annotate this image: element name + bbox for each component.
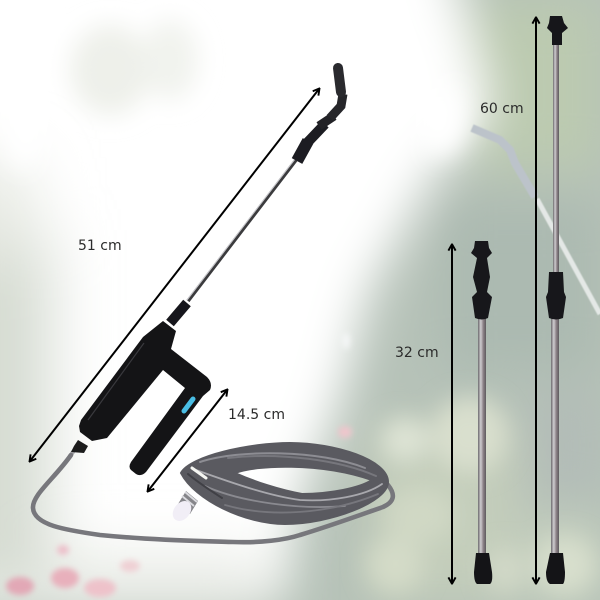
label: 14.5 cm: 14.5 cm — [228, 407, 285, 423]
extension rod: 32 cm — [471, 241, 492, 584]
spray wand with nozzle — [170, 68, 343, 323]
feed hose — [33, 440, 393, 542]
label: 32 cm: 32 cm — [395, 345, 439, 361]
indicator light — [184, 399, 193, 411]
extension rod: 60 cm — [546, 16, 568, 584]
hose coil — [33, 440, 393, 542]
ghost sprayer in background — [472, 128, 600, 314]
dimension arrow: 14.5 cm — [148, 390, 227, 491]
dimension arrow: 60 cm — [535, 18, 537, 583]
handle with trigger grip — [79, 321, 211, 475]
dimension arrow: 32 cm — [451, 245, 453, 583]
coil body — [181, 443, 388, 524]
dimension arrow: 51 cm — [30, 89, 319, 461]
label: 51 cm: 51 cm — [78, 238, 122, 254]
hose filter — [169, 491, 198, 525]
small gap inside coil — [192, 468, 206, 478]
label: 60 cm: 60 cm — [480, 101, 524, 117]
